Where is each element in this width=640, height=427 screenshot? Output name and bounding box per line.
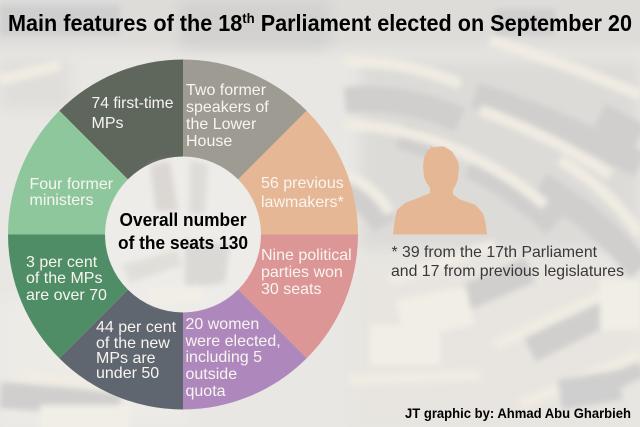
segment: 74 first-time MPs: MPs: [92, 115, 124, 132]
segment: 44 per cent under 50: 44 per cent: [96, 319, 177, 336]
segment: 44 per cent under 50: [59, 290, 183, 410]
segment: 44 per cent under 50: of the new: [96, 335, 170, 352]
segment: 56 previous lawmakers: [238, 111, 358, 234]
segment: 74 first-time MPs: 74 first-time: [92, 95, 174, 112]
segment: two former speakers: the Lower: [186, 116, 257, 133]
donut chart: main features: [8, 60, 358, 410]
segment: four former ministers: Four former: [30, 176, 114, 193]
donut centre: overall number of seats: of the seats 130: [118, 233, 248, 253]
segment: 20 women: including 5: [186, 349, 262, 366]
segment: four former ministers: ministers: [30, 192, 94, 209]
segment: two former speakers: Two former: [186, 82, 267, 99]
segment: 20 women: quota: [186, 383, 226, 400]
footnote: * 39 from the 17th Parliament: [392, 244, 598, 261]
segment: nine political parties: 30 seats: [261, 281, 321, 298]
segment: nine political parties: Nine political: [261, 247, 352, 264]
donut centre: overall number of seats: [106, 157, 260, 312]
segment: four former ministers: [8, 111, 128, 234]
segment: 44 per cent under 50: MPs are: [96, 350, 156, 367]
title: Main features of the 18: [8, 10, 257, 36]
segment: nine political parties: parties won: [261, 264, 343, 281]
segment: two former speakers: [183, 60, 307, 179]
segment: 3 per cent over 70: are over 70: [26, 287, 107, 304]
segment: 20 women: 20 women: [186, 316, 259, 333]
segment: 20 women: [183, 290, 307, 410]
segment: nine political parties: [238, 234, 358, 358]
title: th: [242, 10, 255, 26]
segment: 3 per cent over 70: of the MPs: [26, 270, 102, 287]
segment: 20 women: outside: [186, 366, 237, 383]
segment: 3 per cent over 70: [8, 234, 128, 358]
segment: 20 women: were elected,: [184, 333, 281, 350]
icon: person silhouette: [393, 145, 487, 234]
segment: 3 per cent over 70: 3 per cent: [26, 254, 98, 271]
segment: 44 per cent under 50: under 50: [96, 365, 159, 382]
segment: 74 first-time MPs: [59, 60, 183, 179]
segment: two former speakers: speakers of: [186, 99, 269, 116]
footnote: and 17 from previous legislatures: [391, 263, 624, 280]
segment: two former speakers: House: [186, 133, 232, 150]
donut centre: overall number of seats: Overall number: [120, 210, 246, 230]
segment: 56 previous lawmakers: 56 previous: [261, 175, 344, 192]
segment: 56 previous lawmakers: lawmakers*: [261, 194, 344, 211]
